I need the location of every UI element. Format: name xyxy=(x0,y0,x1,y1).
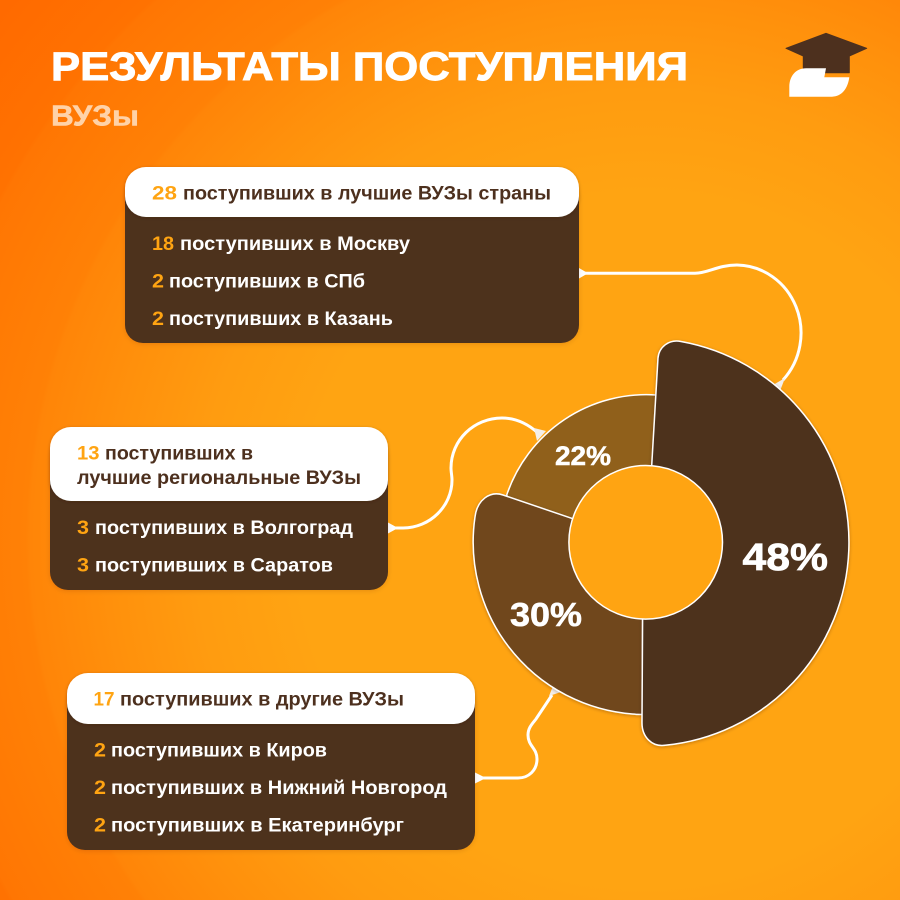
panel: top-ranked universities xyxy=(125,167,579,343)
segment: 30% xyxy=(473,494,643,714)
donut chart xyxy=(473,341,849,745)
row: Moscow: поступивших в Москву xyxy=(180,234,410,255)
header text: 28 xyxy=(152,184,177,204)
row: Saratov: 3 xyxy=(77,556,89,576)
icon: graduation cap logo xyxy=(786,33,867,97)
row: Kirov: 2 xyxy=(94,740,106,762)
subtitle: ВУЗы xyxy=(51,100,139,132)
row: Volgograd: 3 xyxy=(77,518,89,539)
header text: 13 xyxy=(77,443,100,464)
header text: поступивших в xyxy=(105,443,253,464)
connector: middle panel to 22% segment xyxy=(388,418,546,534)
segment: 48% xyxy=(642,341,849,745)
donut hole xyxy=(569,466,722,619)
row: Kazan: 2 xyxy=(152,309,164,330)
panel body xyxy=(50,440,388,590)
segment: 22% xyxy=(507,395,660,545)
row: Nizhny Novgorod: поступивших в Нижний Новгород xyxy=(111,778,447,799)
panel: other universities xyxy=(67,673,475,850)
panel body xyxy=(125,180,579,343)
row: Saint Petersburg: поступивших в СПб xyxy=(169,272,365,292)
segment: 22%: 22% xyxy=(555,441,611,471)
row: Saratov: поступивших в Саратов xyxy=(95,556,333,576)
row: Kazan: поступивших в Казань xyxy=(169,309,393,330)
row: Nizhny Novgorod: 2 xyxy=(94,778,106,799)
panel header xyxy=(67,673,475,724)
row: Kirov: поступивших в Киров xyxy=(111,740,327,762)
segment: 30%: 30% xyxy=(510,596,582,633)
row: Yekaterinburg: поступивших в Екатеринбург xyxy=(111,816,404,836)
header text: лучшие региональные ВУЗы xyxy=(77,468,361,489)
segment: 48%: 48% xyxy=(742,537,828,579)
connector: bottom panel to 30% segment xyxy=(475,686,561,784)
row: Yekaterinburg: 2 xyxy=(94,816,106,836)
header text: поступивших в другие ВУЗы xyxy=(120,690,404,711)
header text: 17 xyxy=(94,690,114,711)
connector: top panel to 48% segment xyxy=(579,265,801,391)
panel body xyxy=(67,686,475,850)
row: Saint Petersburg: 2 xyxy=(152,272,164,292)
title: РЕЗУЛЬТАТЫ ПОСТУПЛЕНИЯ xyxy=(51,45,688,89)
panel: regional universities xyxy=(50,427,388,590)
panel header xyxy=(125,167,579,217)
panel header xyxy=(50,427,388,501)
header text: поступивших в лучшие ВУЗы страны xyxy=(183,184,551,204)
row: Volgograd: поступивших в Волгоград xyxy=(95,518,353,539)
row: Moscow: 18 xyxy=(152,234,174,255)
header text xyxy=(77,443,361,489)
